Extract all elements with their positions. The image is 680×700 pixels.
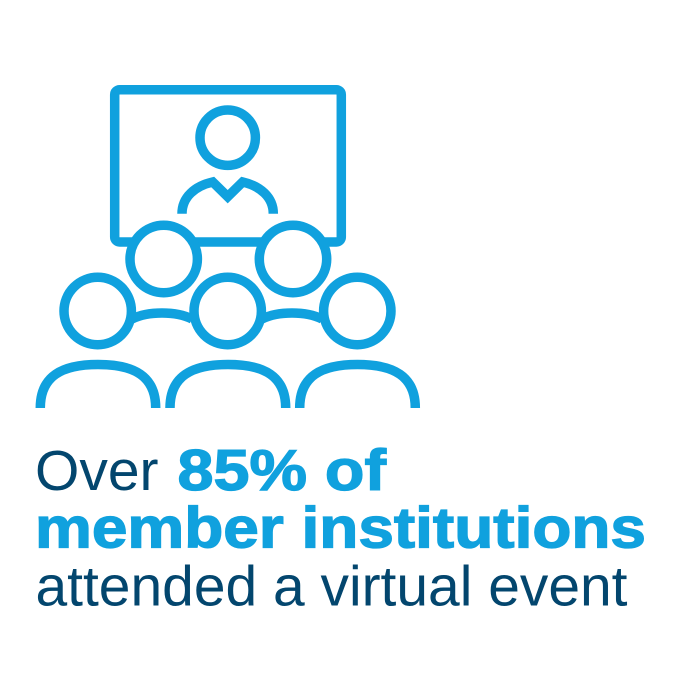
icon: front row body right — [300, 364, 415, 408]
headline line 2: member institutions — [35, 496, 646, 560]
headline text — [35, 439, 646, 618]
headline line 3: attended a virtual event — [36, 554, 628, 618]
icon: back row head right — [259, 225, 327, 293]
icon: back row shoulders — [132, 313, 322, 319]
icon: front row head left — [64, 277, 131, 345]
icon: front row head right — [324, 277, 391, 345]
icon: presentation screen — [115, 90, 341, 242]
icon: presenter head — [200, 110, 255, 165]
icon: front row body left — [40, 364, 156, 408]
icon: front row head center — [194, 277, 261, 345]
headline line 1: 85% of: 85% of — [178, 439, 387, 503]
headline line 1: Over: Over — [35, 439, 159, 503]
icon: back row head left — [130, 225, 197, 293]
icon: virtual meeting audience — [40, 90, 415, 408]
icon: front row body center — [170, 364, 286, 408]
icon: presenter shoulders — [182, 182, 273, 214]
